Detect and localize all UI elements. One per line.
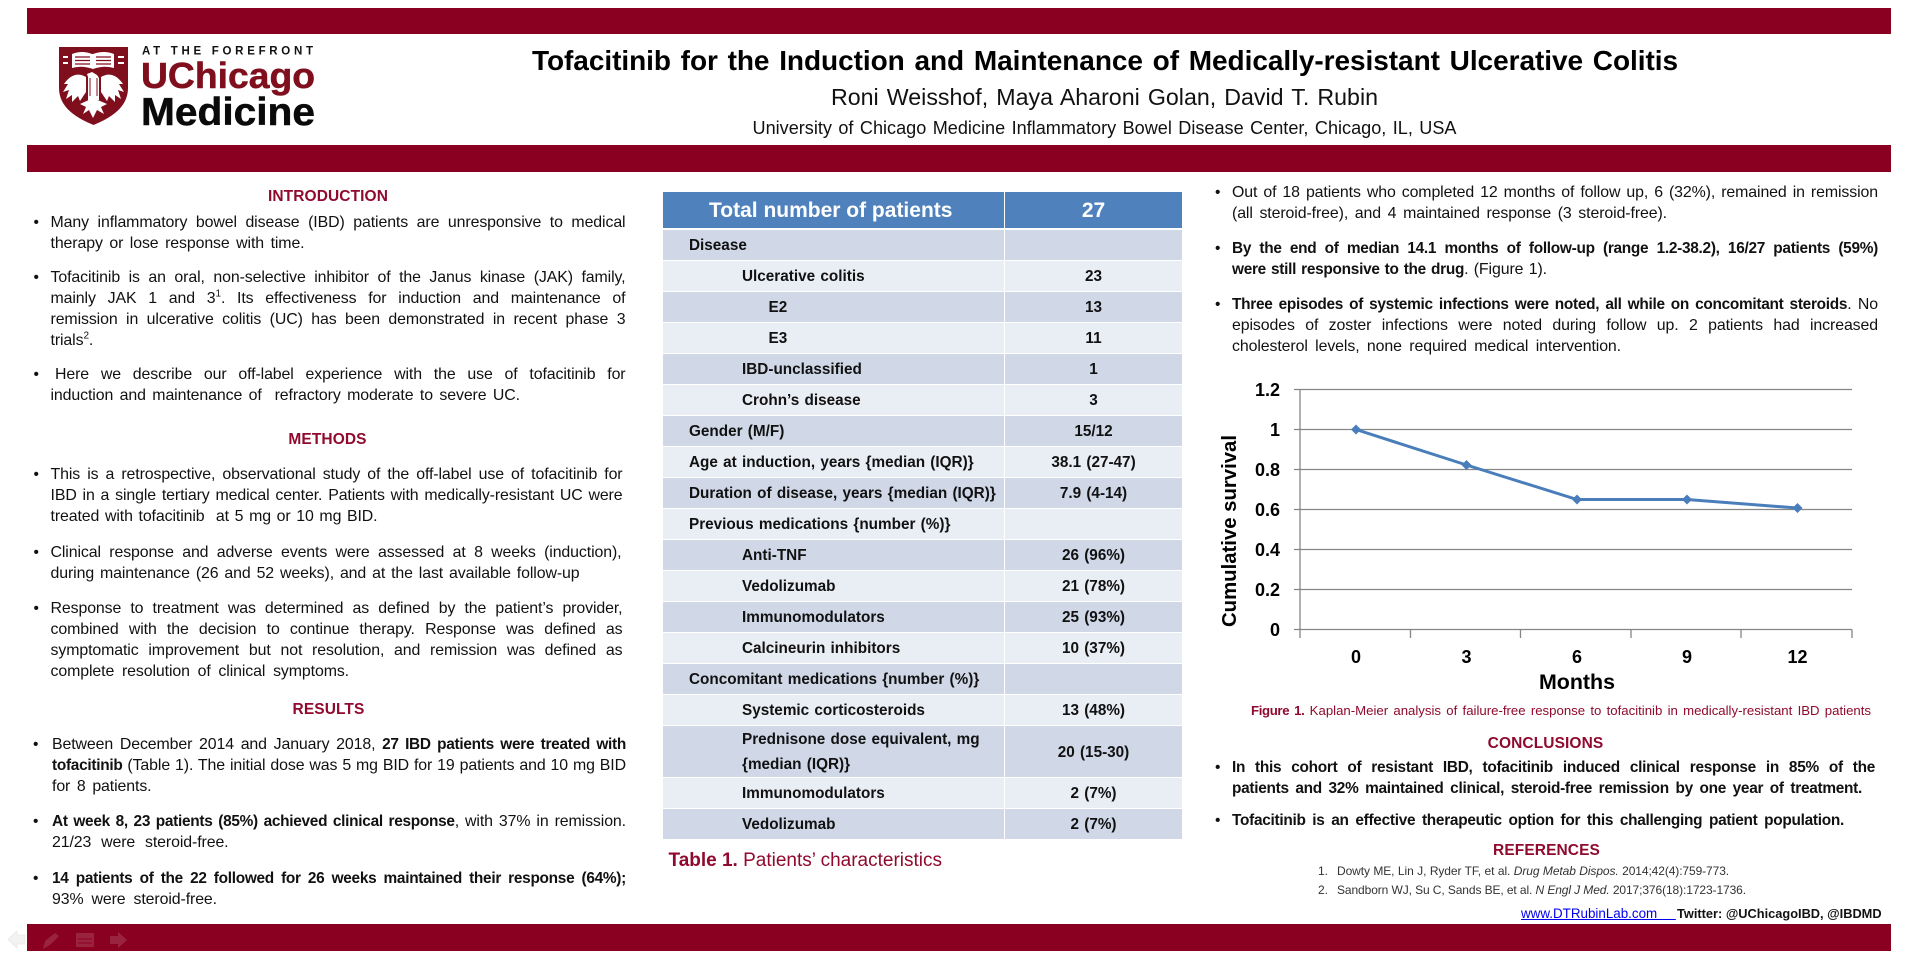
y axis title: Cumulative survival bbox=[1219, 435, 1241, 627]
icon: forward arrow bbox=[110, 932, 127, 948]
row: IBD-unclassified: IBD-unclassified bbox=[742, 361, 862, 378]
row: IBD-unclassified bbox=[663, 354, 1182, 384]
x axis tick labels: 9 bbox=[1682, 647, 1692, 667]
row: gender bbox=[663, 416, 1182, 446]
x axis title: Months bbox=[1539, 670, 1615, 694]
bullet: study design: This is a retrospective, observational study of the off-label use of tofacitinib for bbox=[50, 466, 622, 483]
row: systemic corticosteroids: 13 (48%) bbox=[1062, 702, 1125, 719]
row: concomitant medications bbox=[663, 664, 1182, 694]
row: E2: E2 bbox=[768, 299, 787, 316]
panel: introduction: • bbox=[34, 269, 39, 286]
x axis tick labels: 0 bbox=[1351, 647, 1361, 667]
row: vedolizumab concomitant: Vedolizumab bbox=[742, 816, 836, 833]
bullet: tofacitinib description: trials2. bbox=[50, 331, 93, 349]
bullet: study aim bbox=[34, 366, 626, 404]
row: immunomodulators previous: Immunomodulators bbox=[742, 609, 885, 626]
bullet: 12 month follow-up: Out of 18 patients who completed 12 months of follow up, 6 (32%), remained in remission bbox=[1232, 184, 1878, 201]
bullet: tofacitinib description bbox=[34, 269, 626, 349]
bullet: non-responsive patients: Many inflammatory bowel disease (IBD) patients are unresponsive to medical bbox=[50, 214, 626, 231]
row: anti-TNF: Anti-TNF bbox=[742, 547, 807, 564]
bullet: response definitions bbox=[34, 600, 622, 680]
bullet: adverse events: cholesterol levels, none required medical intervention. bbox=[1232, 338, 1621, 355]
bullet: cohort: Between December 2014 and January 2018, 27 IBD patients were treated with bbox=[52, 736, 626, 753]
row: prednisone dose bbox=[663, 726, 1182, 777]
heading: conclusions: CONCLUSIONS bbox=[1488, 735, 1603, 752]
row: duration of disease: 7.9 (4-14) bbox=[1060, 485, 1127, 502]
row: vedolizumab previous: Vedolizumab bbox=[742, 578, 836, 595]
panel: introduction bbox=[34, 188, 626, 404]
banner bar under header bbox=[27, 145, 1891, 172]
row: duration of disease bbox=[663, 478, 1182, 508]
row: E2 bbox=[663, 292, 1182, 322]
y axis tick labels: 0.4 bbox=[1255, 540, 1280, 560]
heading: references: REFERENCES bbox=[1493, 842, 1600, 859]
row: Crohn's disease: Crohn’s disease bbox=[742, 392, 861, 409]
x axis tick labels bbox=[1351, 647, 1808, 667]
icon: pencil bbox=[43, 933, 59, 949]
row: Crohn's disease bbox=[663, 385, 1182, 415]
bullet: assessments: Clinical response and adverse events were assessed at 8 weeks (induction), bbox=[50, 544, 622, 561]
bullet: median follow-up bbox=[1215, 240, 1878, 278]
x axis tick labels: 3 bbox=[1461, 647, 1472, 667]
row: gender: Gender (M/F) bbox=[689, 423, 784, 440]
table header row bbox=[663, 192, 1182, 839]
row: age at induction: Age at induction, years {median (IQR)} bbox=[689, 454, 974, 471]
y axis tick labels: 0 bbox=[1270, 620, 1280, 640]
bullet: response definitions: Response to treatment was determined as defined by the patient’s provider, bbox=[50, 600, 622, 617]
table: patient characteristics bbox=[663, 192, 1182, 839]
bullet: adverse events bbox=[1215, 296, 1878, 355]
affiliation: University of Chicago Medicine Inflammatory Bowel Disease Center, Chicago, IL, USA bbox=[752, 118, 1456, 138]
bullet: response definitions: complete resolution of clinical symptoms. bbox=[50, 663, 349, 680]
icon: university shield bbox=[59, 47, 128, 125]
chart: Kaplan-Meier failure-free response bbox=[1219, 380, 1853, 694]
bullet: week 26 response bbox=[33, 870, 626, 908]
bullet: response definitions: combined with the decision to continue therapy. Response was defined as bbox=[50, 621, 622, 638]
logo: UChicago Medicine bbox=[59, 46, 315, 130]
twitter handles: Twitter: @UChicagoIBD, @IBDMD bbox=[1677, 906, 1882, 921]
row: immunomodulators concomitant: Immunomodulators bbox=[742, 785, 885, 802]
table header row: 27 bbox=[1082, 199, 1105, 222]
bullet: non-responsive patients: therapy or lose response with time. bbox=[50, 235, 304, 252]
bullet: cohort bbox=[33, 736, 626, 795]
row: systemic corticosteroids bbox=[663, 695, 1182, 725]
bullet: main conclusion: In this cohort of resistant IBD, tofacitinib induced clinical response in 85% of the bbox=[1232, 759, 1875, 776]
row: concomitant medications: Concomitant medications {number (%)} bbox=[689, 671, 979, 688]
row: prednisone dose: Prednisone dose equivalent, mg bbox=[742, 731, 980, 748]
bullet: week 8 response: 21/23 were steroid-free. bbox=[52, 834, 228, 851]
bullet: assessments bbox=[34, 544, 622, 582]
row: ulcerative colitis: 23 bbox=[1085, 268, 1102, 285]
bullet: 12 month follow-up bbox=[1215, 184, 1878, 222]
figure caption: Figure 1. Kaplan-Meier analysis of failure-free response to tofacitinib in medically-resistant IBD patients bbox=[1251, 703, 1871, 718]
row: vedolizumab concomitant: 2 (7%) bbox=[1070, 816, 1117, 833]
heading: introduction: INTRODUCTION bbox=[268, 188, 388, 205]
bullet: main conclusion: patients and 32% maintained clinical, steroid-free remission by one year of treatment. bbox=[1232, 780, 1862, 797]
panel: results continued: • bbox=[1215, 184, 1220, 201]
y axis tick labels: 0.8 bbox=[1255, 460, 1280, 480]
authors: Roni Weisshof, Maya Aharoni Golan, David T. Rubin bbox=[831, 84, 1378, 110]
y axis tick labels: 0.6 bbox=[1255, 500, 1280, 520]
row: prednisone dose: {median (IQR)} bbox=[742, 756, 850, 773]
panel: results: • bbox=[33, 736, 38, 753]
panel: methods bbox=[34, 431, 622, 680]
row: E3: 11 bbox=[1085, 330, 1102, 347]
row: vedolizumab previous bbox=[663, 571, 1182, 601]
bullet: tofacitinib description: remission in ulcerative colitis (UC) has been demonstrated in recent phase 3 bbox=[50, 311, 626, 328]
row: E3 bbox=[663, 323, 1182, 353]
panel: methods: • bbox=[34, 466, 39, 483]
title: Tofacitinib for the Induction and Maintenance of Medically-resistant Ulcerative Colitis bbox=[532, 45, 1678, 76]
bottom banner bar bbox=[27, 924, 1891, 951]
bullet: week 26 response: 14 patients of the 22 followed for 26 weeks maintained their response (64%); bbox=[52, 870, 626, 887]
slideshow navigation icons bbox=[5, 928, 130, 952]
bullet: study aim: Here we describe our off-label experience with the use of tofacitinib for bbox=[55, 366, 626, 383]
row: anti-TNF: 26 (96%) bbox=[1062, 547, 1125, 564]
reference 1 bbox=[1318, 862, 1748, 881]
bullet: adverse events: Three episodes of systemic infections were noted, all while on concomitant steroids. No bbox=[1232, 296, 1878, 313]
x axis tick labels: 12 bbox=[1787, 647, 1808, 667]
row: vedolizumab previous: 21 (78%) bbox=[1062, 578, 1125, 595]
row: ulcerative colitis: Ulcerative colitis bbox=[742, 268, 865, 285]
logo word: UChicago: UChicago bbox=[141, 55, 315, 96]
bullet: tofacitinib description: mainly JAK 1 and 31. Its effectiveness for induction and maintenance of bbox=[50, 289, 626, 307]
row: systemic corticosteroids: Systemic corticosteroids bbox=[742, 702, 925, 719]
bullet: 12 month follow-up: (all steroid-free), and 4 maintained response (3 steroid-free). bbox=[1232, 205, 1667, 222]
row: immunomodulators previous: 25 (93%) bbox=[1062, 609, 1125, 626]
reference 2: 2. bbox=[1318, 883, 1328, 897]
row: IBD-unclassified: 1 bbox=[1089, 361, 1098, 378]
bullet: study design: treated with tofacitinib at 5 mg or 10 mg BID. bbox=[50, 508, 378, 525]
bullet: non-responsive patients bbox=[34, 214, 626, 252]
panel: results: • bbox=[33, 870, 38, 887]
panel: conclusions bbox=[1210, 734, 1882, 839]
bullet: week 26 response: 93% were steroid-free. bbox=[52, 891, 217, 908]
bullet: adverse events: episodes of zoster infections were noted during follow up. 2 patients had increased bbox=[1232, 317, 1878, 334]
panel: introduction: • bbox=[34, 366, 39, 383]
row: duration of disease: Duration of disease, years {median (IQR)} bbox=[689, 485, 996, 502]
bullet: median follow-up: By the end of median 14.1 months of follow-up (range 1.2-38.2), 16/27 patients (59%) bbox=[1232, 240, 1878, 257]
row: E2: 13 bbox=[1085, 299, 1102, 316]
bullet: cohort: tofacitinib (Table 1). The initial dose was 5 mg BID for 19 patients and 10 mg BID bbox=[52, 757, 626, 774]
panel: conclusions: • bbox=[1215, 812, 1220, 829]
bullet: week 8 response bbox=[33, 813, 626, 851]
panel: results continued bbox=[1215, 184, 1878, 355]
bullet: median follow-up: were still responsive to the drug. (Figure 1). bbox=[1232, 261, 1547, 278]
panel: methods: • bbox=[34, 600, 39, 617]
bullet: main conclusion bbox=[1232, 757, 1878, 799]
bullet: assessments: during maintenance (26 and 52 weeks), and at the last available follow-up bbox=[50, 565, 580, 582]
row: calcineurin inhibitors: 10 (37%) bbox=[1062, 640, 1125, 657]
row: age at induction bbox=[663, 447, 1182, 477]
row: prednisone dose: 20 (15-30) bbox=[1058, 744, 1129, 760]
row: E3: E3 bbox=[768, 330, 787, 347]
panel: results bbox=[33, 701, 626, 908]
row: immunomodulators previous bbox=[663, 602, 1182, 632]
row: disease: Disease bbox=[689, 237, 747, 254]
icon: back arrow bbox=[8, 931, 25, 948]
reference 2: Sandborn WJ, Su C, Sands BE, et al. N Engl J Med. 2017;376(18):1723-1736. bbox=[1337, 883, 1746, 897]
panel: results continued: • bbox=[1215, 240, 1220, 257]
bullet: tofacitinib description: Tofacitinib is an oral, non-selective inhibitor of the Janus kinase (JAK) family, bbox=[50, 269, 626, 286]
row: previous medications bbox=[663, 509, 1182, 539]
bullet: study design: IBD in a single tertiary medical center. Patients with medically-resistant UC were bbox=[50, 487, 622, 504]
top banner bar bbox=[27, 8, 1891, 34]
row: age at induction: 38.1 (27-47) bbox=[1051, 454, 1136, 471]
heading: methods: METHODS bbox=[288, 431, 367, 448]
row: calcineurin inhibitors: Calcineurin inhibitors bbox=[742, 640, 900, 657]
row: disease bbox=[663, 230, 1182, 260]
row: previous medications: Previous medications {number (%)} bbox=[689, 516, 950, 533]
y axis tick labels bbox=[1255, 380, 1280, 640]
panel: introduction: • bbox=[34, 214, 39, 231]
footer links bbox=[1521, 905, 1883, 923]
table header row: Total number of patients bbox=[709, 199, 952, 222]
bullet: study aim: induction and maintenance of refractory moderate to severe UC. bbox=[50, 387, 520, 404]
x axis tick labels: 6 bbox=[1572, 647, 1582, 667]
panel: methods: • bbox=[34, 544, 39, 561]
panel: results continued: • bbox=[1215, 296, 1220, 313]
panel: conclusions: • bbox=[1215, 759, 1220, 776]
bullet: week 8 response: At week 8, 23 patients (85%) achieved clinical response, with 37% in remission. bbox=[52, 813, 626, 830]
reference 1: 1. bbox=[1318, 864, 1328, 878]
table caption: Table 1. Patients’ characteristics bbox=[668, 850, 942, 871]
row: immunomodulators concomitant bbox=[663, 778, 1182, 808]
row: gender: 15/12 bbox=[1074, 423, 1113, 440]
heading: results: RESULTS bbox=[293, 701, 364, 718]
panel: results: • bbox=[33, 813, 38, 830]
bullet: response definitions: symptomatic improvement but not resolution, and remission was defined as bbox=[50, 642, 622, 659]
website link: www.DTRubinLab.com bbox=[1521, 906, 1657, 921]
row: vedolizumab concomitant bbox=[663, 809, 1182, 839]
icon: menu bbox=[76, 933, 94, 947]
bullet: therapeutic option: Tofacitinib is an effective therapeutic option for this challenging patient population. bbox=[1232, 812, 1844, 829]
row: immunomodulators concomitant: 2 (7%) bbox=[1070, 785, 1117, 802]
row: calcineurin inhibitors bbox=[663, 633, 1182, 663]
logo tagline: AT THE FOREFRONT bbox=[142, 46, 313, 58]
row: anti-TNF bbox=[663, 540, 1182, 570]
reference 1: Dowty ME, Lin J, Ryder TF, et al. Drug Metab Dispos. 2014;42(4):759-773. bbox=[1337, 864, 1729, 878]
data series line bbox=[1351, 424, 1802, 513]
bullet: cohort: for 8 patients. bbox=[52, 778, 152, 795]
y axis tick labels: 1 bbox=[1270, 420, 1280, 440]
y axis tick labels: 0.2 bbox=[1255, 580, 1280, 600]
row: ulcerative colitis bbox=[663, 261, 1182, 291]
row: Crohn's disease: 3 bbox=[1089, 392, 1098, 409]
y axis tick labels: 1.2 bbox=[1255, 380, 1280, 400]
panel: references bbox=[1300, 841, 1793, 903]
bullet: study design bbox=[34, 466, 622, 525]
